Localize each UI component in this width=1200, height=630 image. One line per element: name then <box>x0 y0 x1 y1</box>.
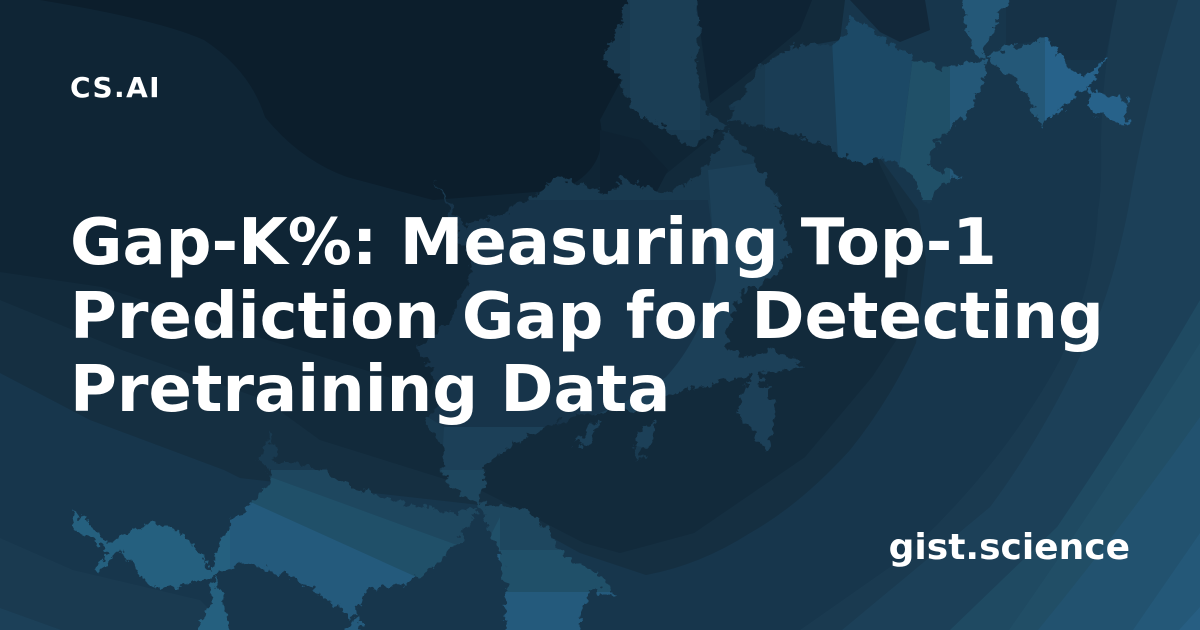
top dark lobes <box>696 0 1117 115</box>
site name: gist.science <box>889 527 1130 568</box>
title: Prediction Gap for Detecting <box>70 280 1104 354</box>
title: Gap-K%: Measuring Top-1 <box>70 206 997 280</box>
category label: CS.AI <box>70 71 161 104</box>
title <box>70 206 1104 427</box>
title: Pretraining Data <box>70 353 670 427</box>
